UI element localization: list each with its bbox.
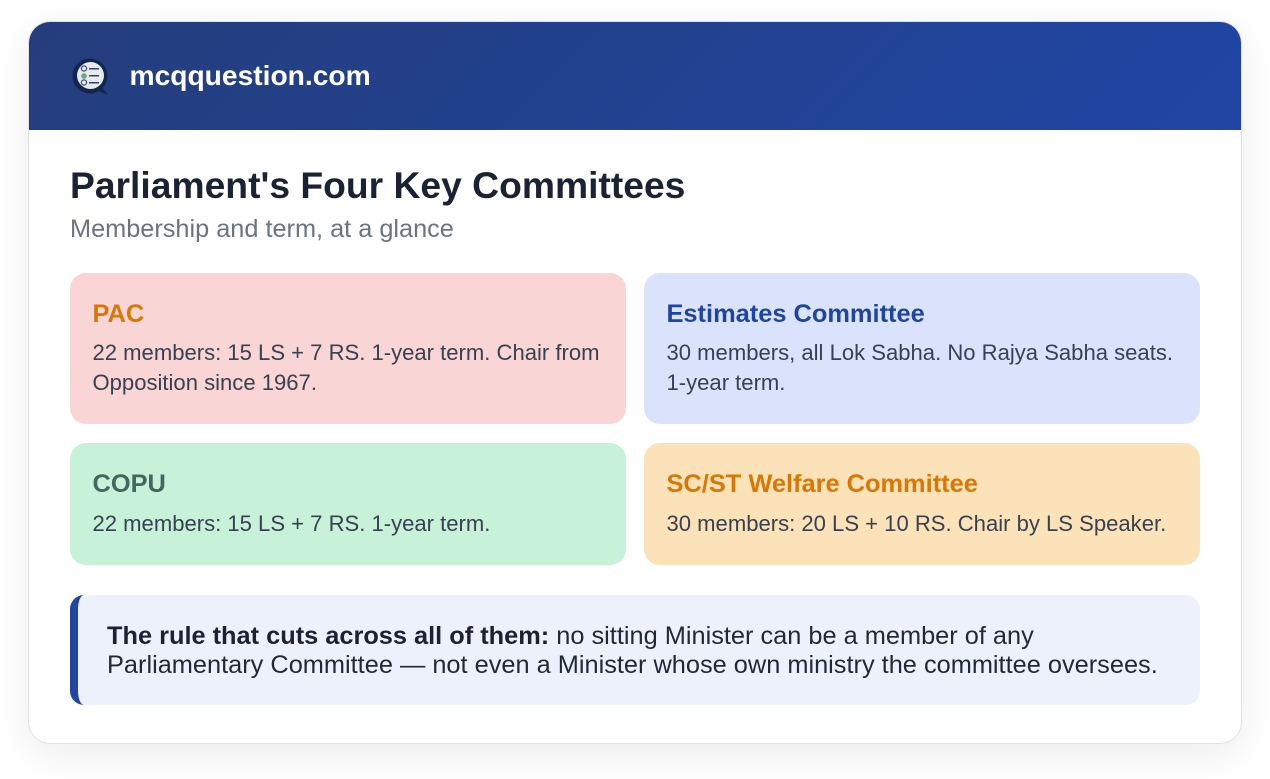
- callout: rule: The rule that cuts across all of them: no sitting Minister can be a member of any: [107, 622, 1034, 650]
- brand name: mcqquestion.com: [130, 59, 371, 91]
- panel: Estimates Committee: 30 members, all Lok Sabha. No Rajya Sabha seats.: [666, 340, 1173, 365]
- panel: COPU: [70, 443, 626, 565]
- callout: rule: [70, 595, 1200, 705]
- panel: PAC: PAC: [92, 300, 144, 328]
- title: Parliament's Four Key Committees: [70, 164, 685, 206]
- panel: SC/ST Welfare Committee: SC/ST Welfare Committee: [666, 470, 978, 498]
- panel: COPU: 22 members: 15 LS + 7 RS. 1-year term.: [92, 511, 490, 536]
- callout: rule: Parliamentary Committee — not even a Minister whose own ministry the committee oversees.: [107, 651, 1158, 679]
- subtitle: Membership and term, at a glance: [70, 215, 454, 243]
- panel: SC/ST Welfare Committee: [644, 443, 1200, 565]
- panel: COPU: COPU: [92, 470, 166, 498]
- icon: quiz logo: [72, 58, 108, 95]
- panel: PAC: Opposition since 1967.: [92, 370, 317, 395]
- panel: Estimates Committee: Estimates Committee: [666, 300, 925, 328]
- panel: Estimates Committee: 1-year term.: [666, 370, 785, 395]
- panel: Estimates Committee: [644, 273, 1200, 424]
- panel: PAC: 22 members: 15 LS + 7 RS. 1-year term. Chair from: [92, 340, 600, 365]
- panel: SC/ST Welfare Committee: 30 members: 20 LS + 10 RS. Chair by LS Speaker.: [666, 511, 1166, 536]
- header band: [29, 22, 1241, 130]
- panel: PAC: [70, 273, 626, 424]
